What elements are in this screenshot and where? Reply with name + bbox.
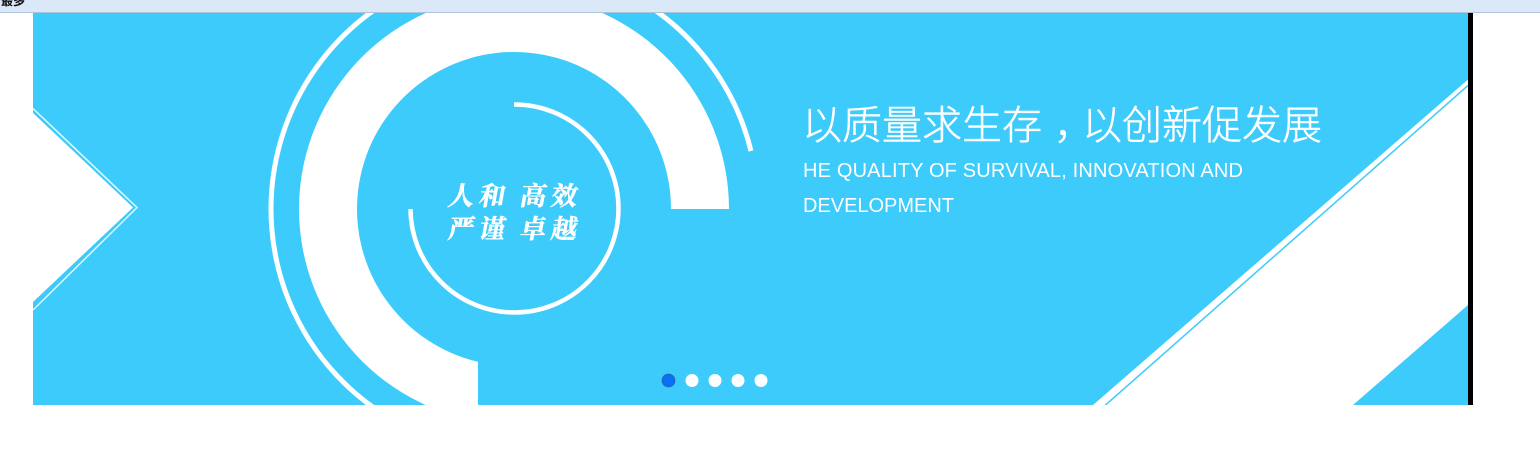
circular emblem rings [268, 13, 754, 405]
outer thin ring [268, 13, 754, 405]
carousel dots [662, 374, 768, 387]
emblem motto [446, 176, 586, 246]
headline: 以质量求生存 ，以创新促发展 [802, 104, 1322, 148]
right black edge [1468, 13, 1473, 405]
left white arrow [33, 108, 137, 310]
subtitle: HE QUALITY OF SURVIVAL, INNOVATION AND [803, 160, 1243, 182]
subtitle: DEVELOPMENT [803, 195, 954, 217]
emblem motto: 高效 [518, 176, 586, 213]
top browser bar [0, 0, 1540, 13]
thick ring [299, 0, 729, 421]
inner thin ring [410, 104, 618, 312]
subtitle [803, 160, 1243, 217]
emblem motto: 卓越 [518, 209, 586, 246]
emblem motto: 严谨 [446, 209, 514, 246]
right white diagonal band [1093, 80, 1468, 406]
emblem motto: 人和 [446, 176, 514, 213]
